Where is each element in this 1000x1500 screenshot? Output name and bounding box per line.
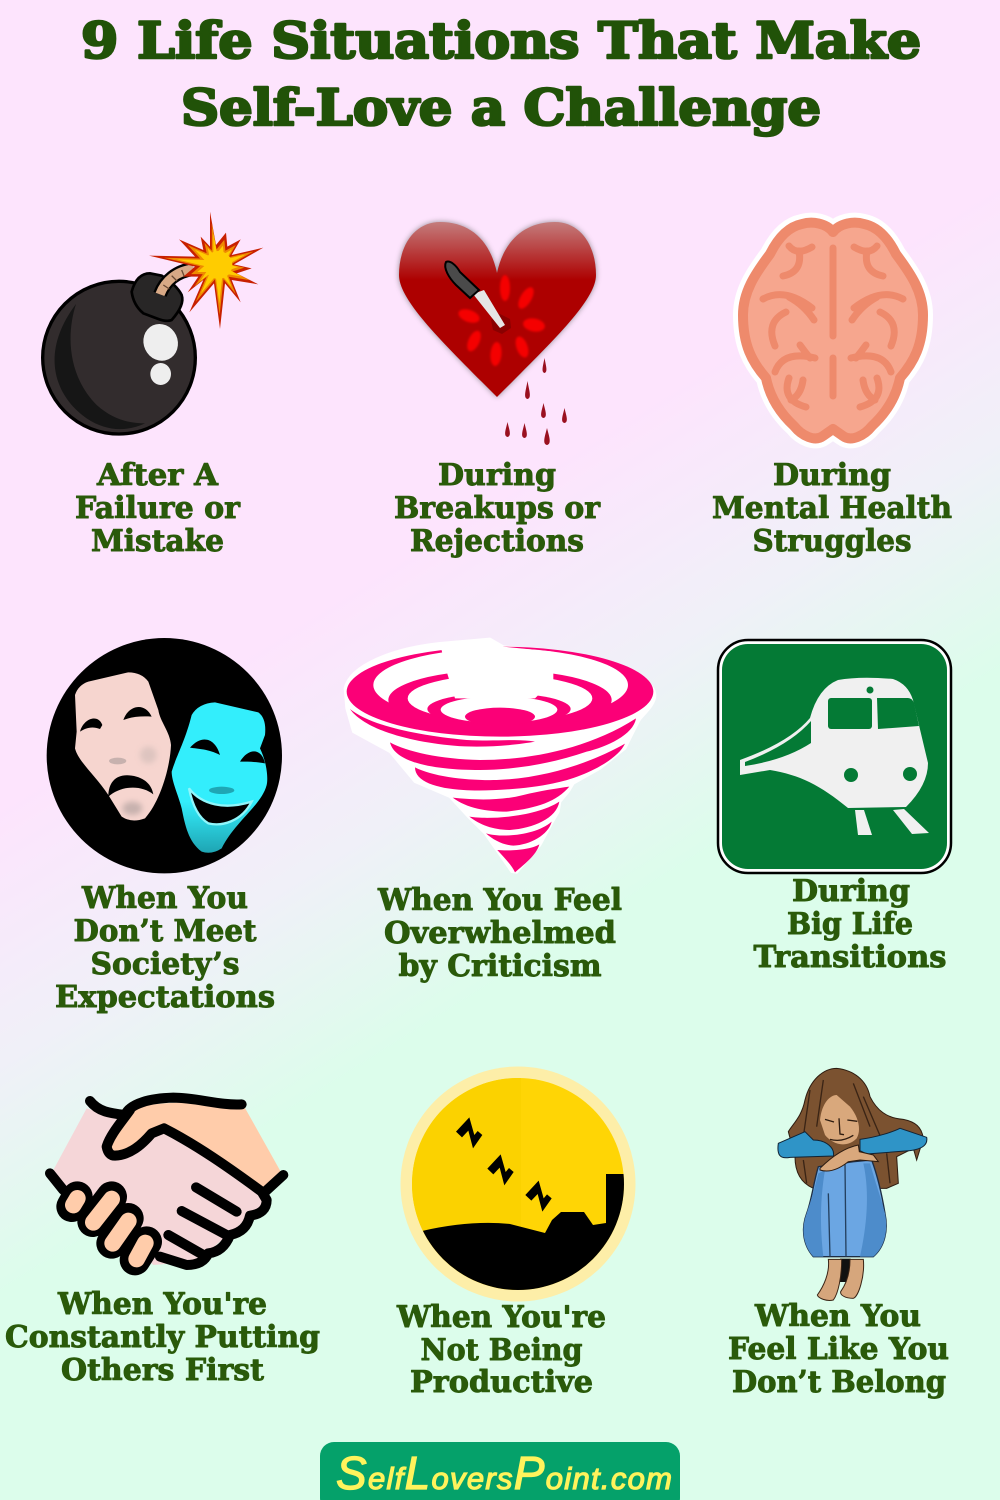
panel: during big life transitions bbox=[718, 640, 951, 975]
label bbox=[377, 883, 622, 984]
icon: train sign bbox=[718, 640, 951, 873]
label: Expectations bbox=[55, 980, 275, 1015]
label: When You're bbox=[57, 1287, 267, 1322]
title: 9 Life Situations That Make bbox=[81, 11, 921, 70]
label: After A bbox=[96, 458, 219, 493]
label: Productive bbox=[410, 1365, 593, 1400]
title bbox=[81, 11, 921, 137]
label: Failure or bbox=[75, 491, 241, 526]
panel: when you're not being productive bbox=[396, 1066, 636, 1400]
label bbox=[754, 874, 946, 975]
label: Mistake bbox=[91, 524, 224, 559]
label: by Criticism bbox=[398, 949, 602, 984]
panel: when you feel overwhelmed by criticism bbox=[345, 639, 655, 984]
label: Rejections bbox=[410, 524, 584, 559]
title: Self-Love a Challenge bbox=[181, 78, 821, 137]
label: Struggles bbox=[752, 524, 912, 559]
label: When You're bbox=[396, 1300, 606, 1335]
label: Feel Like You bbox=[728, 1332, 949, 1367]
label: When You bbox=[81, 881, 248, 916]
label bbox=[394, 458, 601, 559]
label: During bbox=[438, 458, 556, 493]
icon: bomb bbox=[43, 212, 263, 434]
label bbox=[75, 458, 241, 559]
label: Transitions bbox=[754, 940, 946, 975]
icon: handshake bbox=[50, 1098, 283, 1265]
label: During bbox=[792, 874, 910, 909]
label: During bbox=[773, 458, 891, 493]
label: Mental Health bbox=[712, 491, 952, 526]
label: Constantly Putting bbox=[5, 1320, 320, 1355]
panel: during mental health struggles bbox=[712, 223, 952, 559]
panel: when you're constantly putting others first bbox=[5, 1098, 320, 1388]
label bbox=[55, 881, 275, 1015]
panel: during breakups or rejections bbox=[394, 222, 601, 559]
panel: when you feel like you don't belong bbox=[728, 1068, 949, 1400]
label: Don’t Belong bbox=[732, 1365, 946, 1400]
icon: sad girl bbox=[778, 1068, 927, 1300]
label: Don’t Meet bbox=[74, 914, 257, 949]
icon: tornado bbox=[345, 639, 655, 872]
label bbox=[712, 458, 952, 559]
label: Society’s bbox=[90, 947, 240, 982]
label: Big Life bbox=[787, 907, 913, 942]
panel: when you don't meet society's expectations bbox=[47, 638, 282, 1015]
label: Others First bbox=[61, 1353, 264, 1388]
label: Breakups or bbox=[394, 491, 601, 526]
label bbox=[396, 1300, 606, 1400]
label: Overwhelmed bbox=[384, 916, 616, 951]
label bbox=[728, 1299, 949, 1400]
icon: theatre masks bbox=[47, 638, 282, 873]
label bbox=[5, 1287, 320, 1388]
label: Not Being bbox=[420, 1333, 583, 1368]
label: When You bbox=[754, 1299, 921, 1334]
panel: after a failure or mistake bbox=[43, 212, 263, 559]
footer badge: SelfLoversPoint.com bbox=[336, 1447, 672, 1499]
icon: stabbed heart bbox=[399, 222, 596, 445]
label: When You Feel bbox=[377, 883, 622, 918]
icon: sleeping silhouette bbox=[400, 1066, 636, 1302]
icon: brain bbox=[743, 223, 923, 438]
